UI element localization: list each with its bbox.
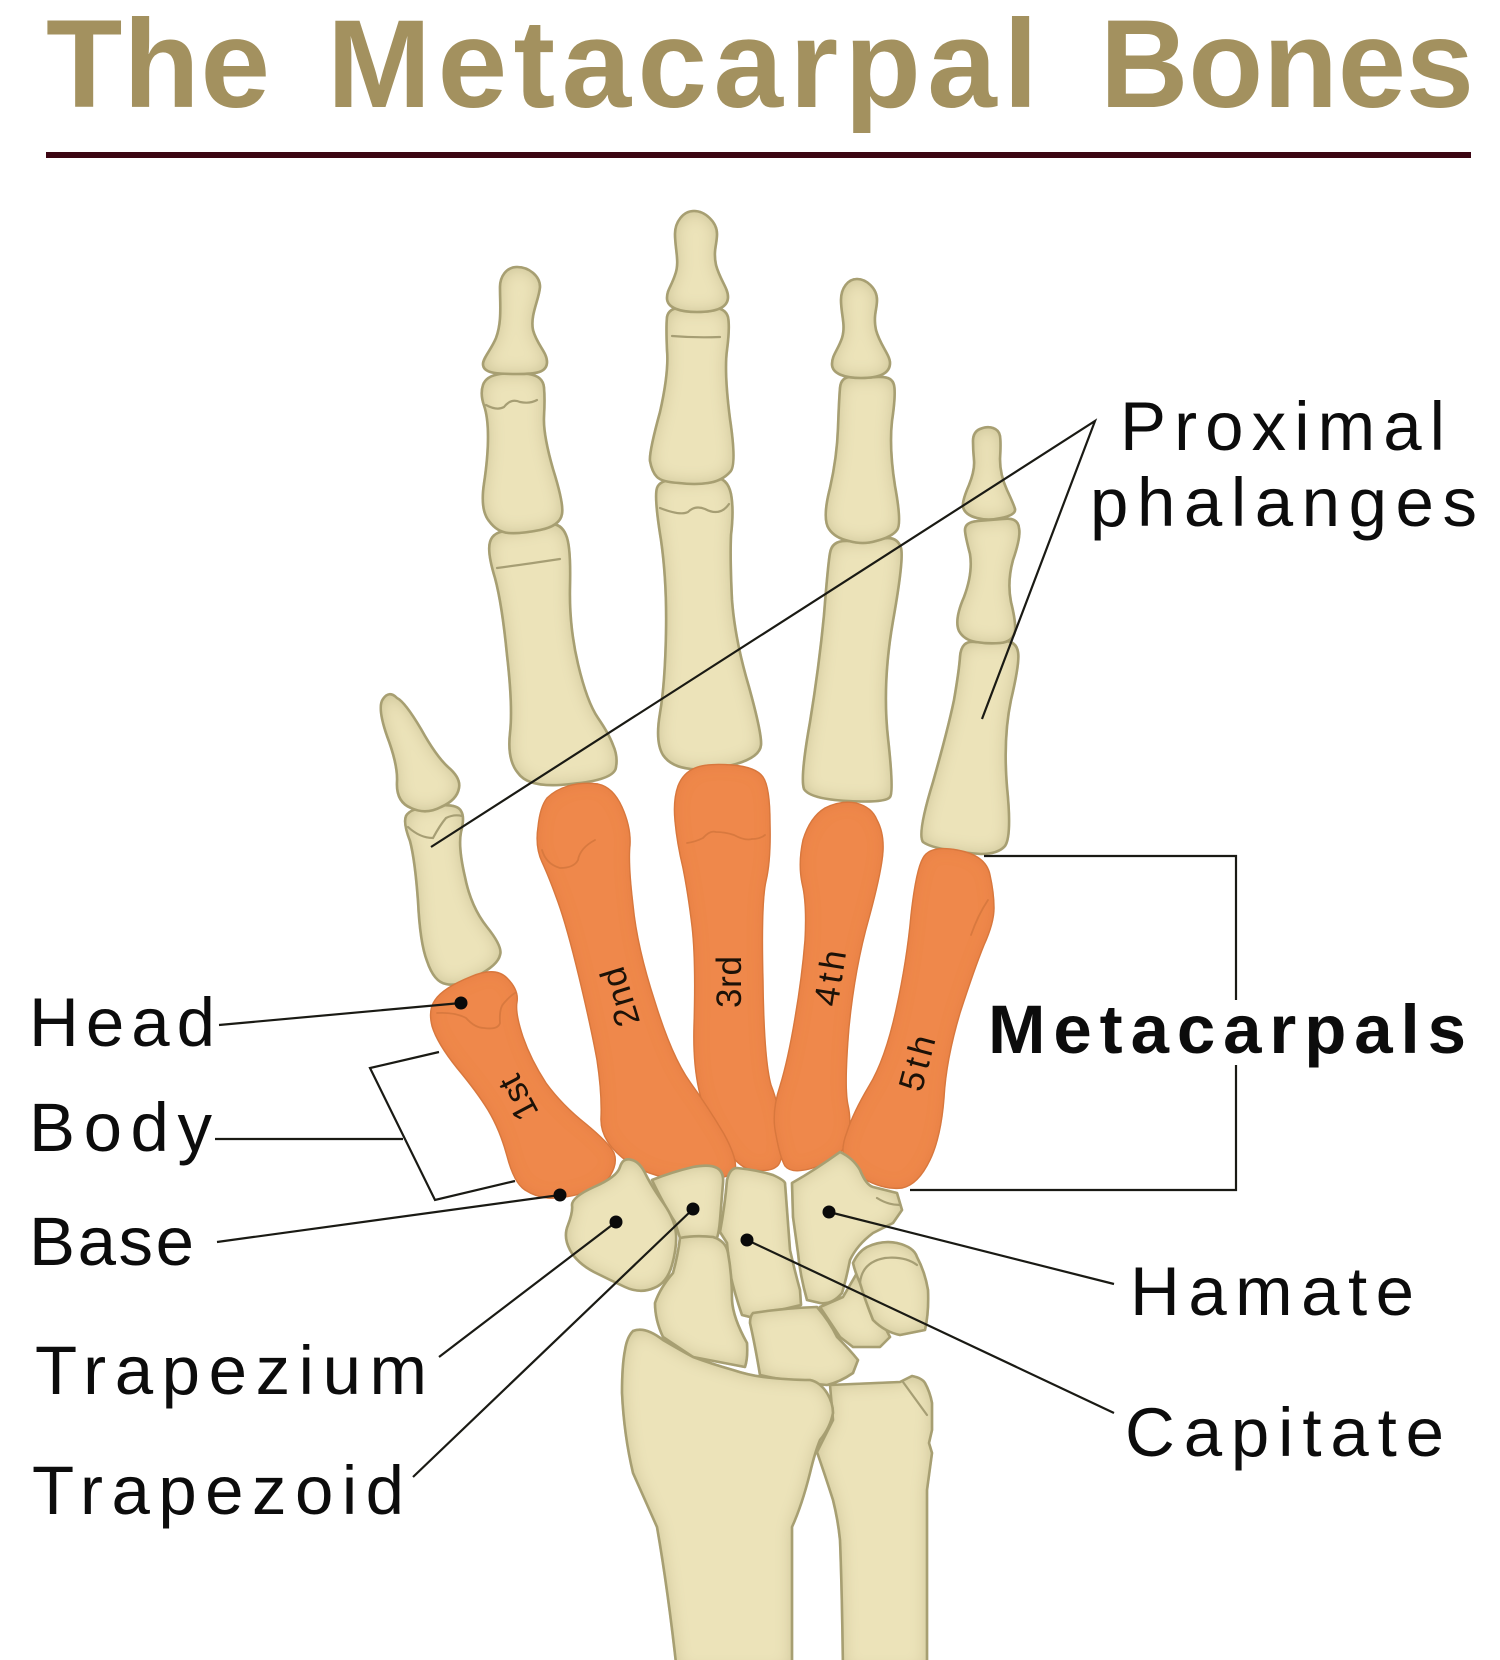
label: head: Head xyxy=(29,984,215,1061)
thumb phalanges xyxy=(381,694,500,985)
leader: proximal phalanges xyxy=(431,421,1095,847)
title rule xyxy=(46,152,1471,158)
finger: middle phalanges xyxy=(650,211,761,769)
1st metacarpal xyxy=(431,972,615,1198)
leader: head xyxy=(219,996,468,1025)
trapezium bone xyxy=(566,1159,676,1291)
hand skeleton illustration xyxy=(381,211,1019,1660)
leader: base xyxy=(217,1188,566,1242)
label: proximal phalanges: phalanges xyxy=(1090,464,1477,541)
label: trapezoid: Trapezoid xyxy=(32,1452,404,1529)
carpal bones xyxy=(566,1152,928,1385)
finger: little phalanges xyxy=(921,427,1019,854)
triquetrum xyxy=(820,1273,890,1347)
5th metacarpal xyxy=(843,849,994,1188)
finger: ring phalanges xyxy=(803,279,902,802)
bracket: body xyxy=(215,1052,515,1200)
leader: hamate xyxy=(822,1206,1114,1284)
label: 3rd: 3rd xyxy=(710,956,749,1008)
label: capitate: Capitate xyxy=(1125,1394,1444,1471)
label: 2nd: 2nd xyxy=(593,962,648,1031)
metacarpal bones xyxy=(431,764,994,1198)
leader: trapezoid xyxy=(413,1202,700,1477)
label: 5th: 5th xyxy=(891,1031,944,1095)
label: hamate: Hamate xyxy=(1130,1253,1414,1330)
label: trapezium: Trapezium xyxy=(35,1332,427,1409)
hamate bone xyxy=(792,1152,902,1303)
radius xyxy=(622,1330,833,1660)
capitate bone xyxy=(720,1168,801,1317)
leader: trapezium xyxy=(439,1216,622,1357)
metacarpals bracket xyxy=(910,856,1236,1190)
3rd metacarpal xyxy=(674,764,782,1171)
label: 4th: 4th xyxy=(807,947,854,1009)
scaphoid xyxy=(655,1236,747,1367)
leader: capitate xyxy=(740,1234,1114,1413)
ulna xyxy=(817,1376,932,1660)
pisiform xyxy=(853,1242,928,1335)
label: 1st: 1st xyxy=(490,1068,546,1127)
2nd metacarpal xyxy=(537,783,736,1180)
finger: index phalanges xyxy=(482,267,617,785)
label: metacarpals: Metacarpals xyxy=(988,991,1466,1068)
lunate xyxy=(750,1307,858,1385)
trapezoid bone xyxy=(652,1166,723,1238)
title xyxy=(46,0,1474,134)
label: proximal phalanges: Proximal xyxy=(1120,388,1445,465)
label: base: Base xyxy=(29,1203,194,1280)
4th metacarpal xyxy=(774,802,883,1171)
label: body: Body xyxy=(29,1089,212,1166)
metacarpal number labels xyxy=(490,947,944,1127)
